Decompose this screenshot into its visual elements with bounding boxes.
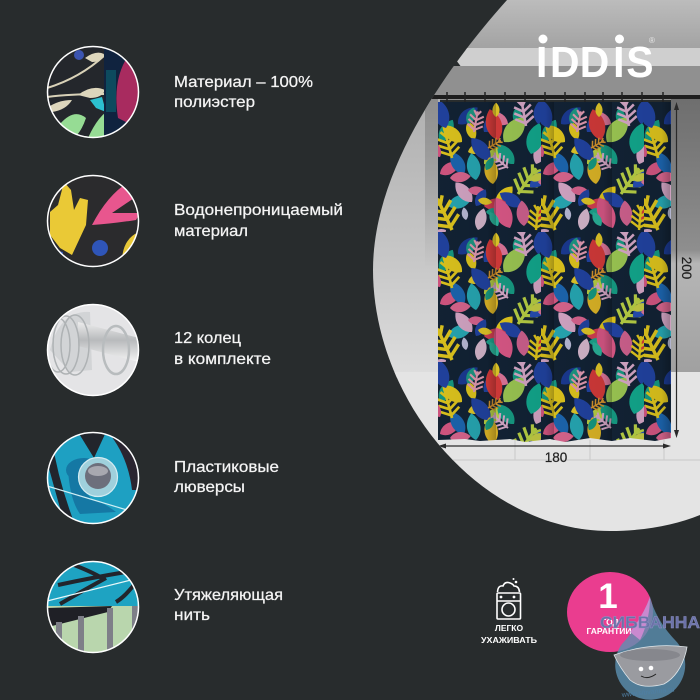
icon: circle border 3 bbox=[48, 304, 138, 396]
tile lines bbox=[452, 440, 700, 460]
text: easy care: УХАЖИВАТЬ bbox=[481, 635, 537, 645]
curtain hooks bbox=[447, 92, 663, 103]
text: material: полиэстер bbox=[174, 94, 255, 111]
floor bbox=[394, 372, 700, 531]
upper wall bbox=[431, 66, 700, 100]
text: grommets: Пластиковые bbox=[174, 459, 279, 476]
curtain bbox=[438, 102, 671, 442]
text: waterproof bbox=[174, 202, 343, 240]
icon: weighted hem thread bbox=[47, 560, 139, 660]
badge label: ГОД bbox=[601, 617, 619, 627]
text: rings: 12 колец bbox=[174, 330, 241, 347]
left wall corner strip bbox=[425, 99, 438, 242]
icon: circle border 1 bbox=[48, 46, 138, 138]
text: weight thread bbox=[174, 587, 283, 624]
logo: IDDIS: ® bbox=[649, 36, 655, 45]
curtain rod bbox=[425, 95, 700, 99]
text: waterproof: материал bbox=[174, 223, 248, 240]
badge label bbox=[586, 617, 632, 636]
watermark: Sibvanna bbox=[600, 597, 700, 700]
text: easy care: ЛЕГКО bbox=[495, 623, 524, 633]
dimension label: 180: 180 bbox=[545, 450, 567, 465]
text: grommets: люверсы bbox=[174, 479, 245, 496]
watermark: url: www.sibvanna.ru bbox=[620, 686, 675, 699]
text: weight thread: нить bbox=[174, 607, 210, 624]
left wall bbox=[370, 98, 440, 378]
badge: warranty bbox=[567, 572, 653, 652]
watermark: bath character bbox=[614, 646, 687, 686]
ceiling bbox=[466, 0, 700, 50]
icon: circle border 4 bbox=[48, 432, 138, 524]
badge label: ГАРАНТИИ bbox=[586, 626, 632, 636]
icon: circle border 5 bbox=[48, 562, 138, 652]
logo: IDDIS: IDDIS bbox=[536, 39, 653, 87]
icon: circle border 2 bbox=[48, 176, 138, 266]
text: rings bbox=[174, 330, 271, 368]
icon: plastic grommet bbox=[48, 434, 136, 524]
dimension: width arrow bbox=[438, 444, 671, 448]
text: material bbox=[174, 74, 313, 111]
icon: washing machine bbox=[497, 578, 520, 619]
text: waterproof: Водонепроницаемый bbox=[174, 202, 343, 219]
icon: waterproof fabric swatch bbox=[50, 185, 138, 256]
dimension: height arrow bbox=[674, 102, 679, 438]
watermark: brand name: СИБВАННА bbox=[600, 613, 700, 632]
dimension label: 200: 200 bbox=[679, 257, 694, 279]
feature texts bbox=[174, 74, 343, 624]
right wall bbox=[671, 98, 700, 374]
text: grommets bbox=[174, 459, 279, 496]
photo: bathroom with curtain bbox=[370, 0, 700, 537]
text: rings: в комплекте bbox=[174, 351, 271, 368]
icon: fabric swatch (material) bbox=[47, 46, 140, 138]
text: weight thread: Утяжеляющая bbox=[174, 587, 283, 604]
text: material: Материал – 100% bbox=[174, 74, 313, 91]
icon: curtain rings bbox=[46, 304, 139, 396]
badge number: 1 bbox=[598, 577, 618, 616]
cornice bbox=[457, 48, 700, 66]
text: easy care bbox=[481, 623, 537, 645]
